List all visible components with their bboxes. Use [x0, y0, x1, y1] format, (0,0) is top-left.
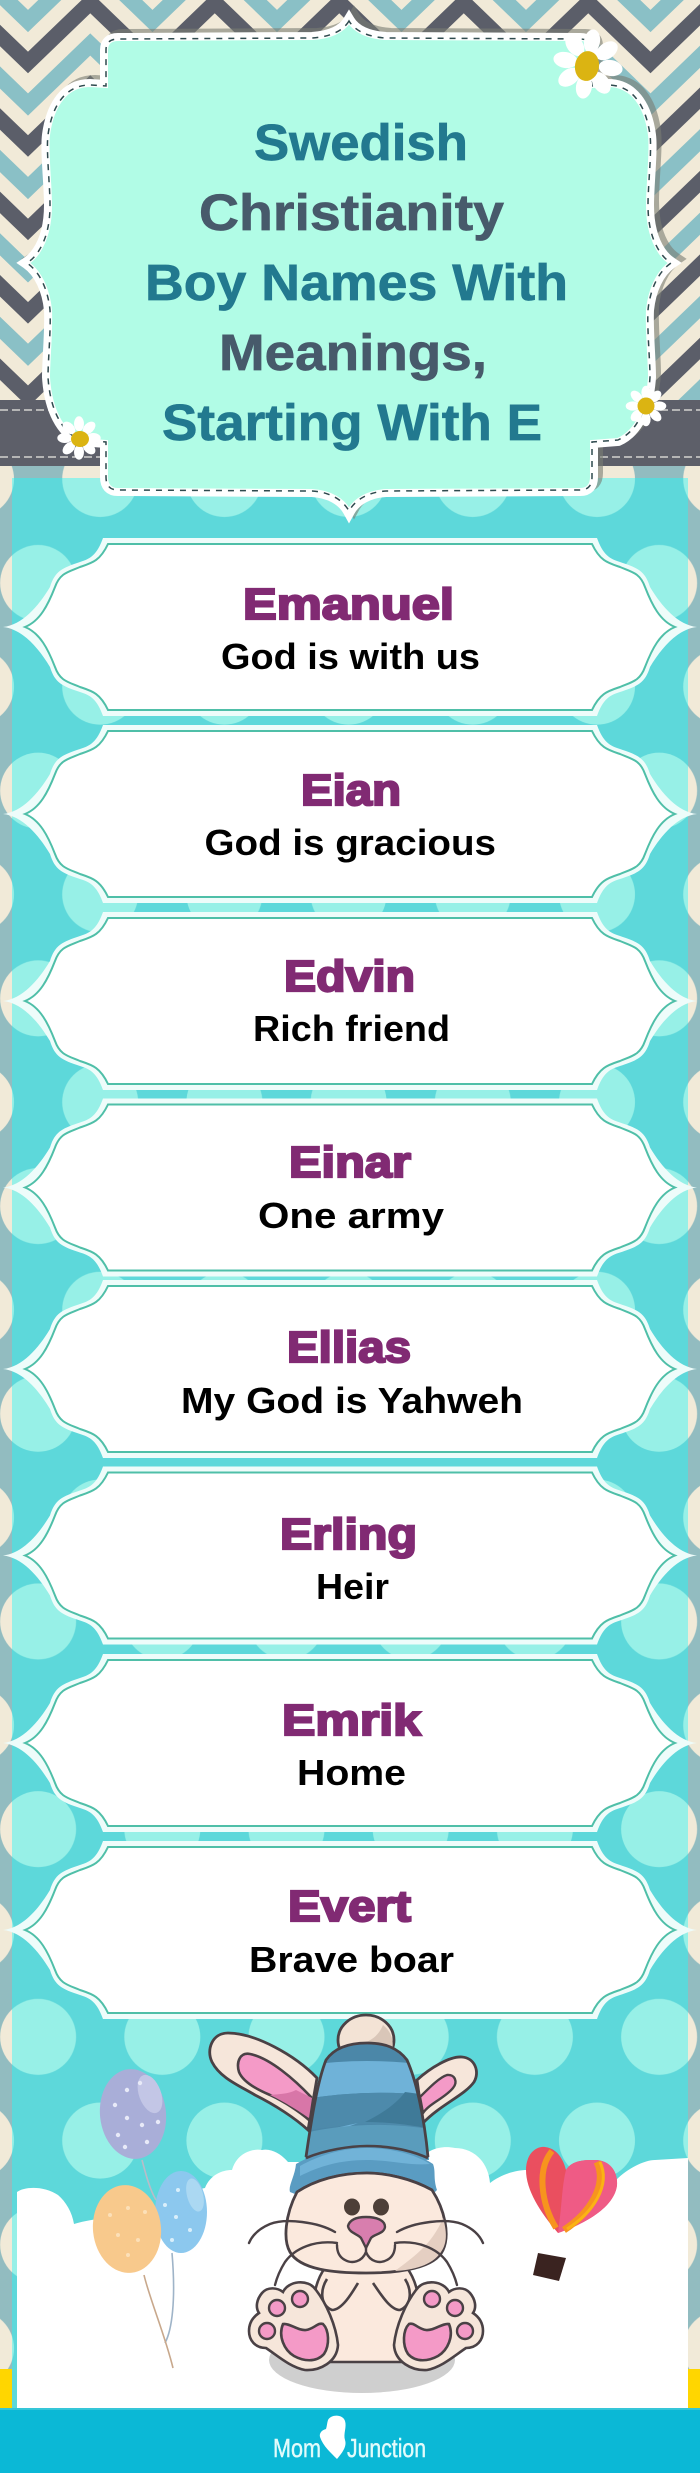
balloon strings — [142, 2160, 174, 2368]
footer bar — [0, 2408, 700, 2473]
title: Christianity — [199, 184, 505, 241]
feet — [249, 2282, 483, 2370]
card: Evert — [3, 1841, 697, 2019]
card: Emanuel — [3, 538, 697, 716]
title: Swedish — [254, 114, 468, 171]
nose — [348, 2217, 385, 2248]
card: Einar: One army — [258, 1195, 444, 1236]
card: Ellias: My God is Yahweh — [181, 1380, 523, 1421]
card: Emanuel: God is with us — [221, 636, 480, 677]
card: Erling: Heir — [316, 1566, 389, 1607]
eyes — [344, 2198, 389, 2216]
head — [286, 2173, 446, 2273]
title: Boy Names With — [145, 254, 568, 311]
card: Einar — [3, 1098, 697, 1276]
title: Starting With E — [162, 394, 542, 451]
card: Erling — [3, 1466, 697, 1644]
ground shadow — [269, 2327, 455, 2393]
card: Edvin: Rich friend — [253, 1008, 450, 1049]
card: Emanuel: Emanuel — [243, 580, 454, 629]
right ear — [417, 2057, 477, 2123]
card: Ellias — [3, 1280, 697, 1458]
MomJunction logo: Mom — [273, 2433, 321, 2463]
MomJunction logo — [273, 2416, 426, 2463]
card: Emrik: Emrik — [282, 1696, 422, 1745]
logo icon — [320, 2416, 346, 2459]
grey stitched band — [0, 400, 700, 466]
purple balloon — [95, 2066, 171, 2162]
white cloud — [17, 2147, 688, 2408]
card: Emrik — [3, 1654, 697, 1832]
orange balloon — [89, 2182, 165, 2276]
icon: daisy bottom left — [57, 416, 101, 460]
left ear — [210, 2033, 317, 2130]
card: Evert: Evert — [288, 1882, 411, 1931]
card: Emrik: Home — [297, 1752, 406, 1793]
hat — [304, 2042, 430, 2160]
icon: daisy bottom right — [626, 386, 666, 426]
card: Erling: Erling — [280, 1510, 417, 1559]
card: Evert: Brave boar — [249, 1939, 454, 1980]
hat brim — [290, 2146, 437, 2194]
card: Eian — [3, 725, 697, 903]
bunny illustration — [210, 2015, 483, 2393]
card: Edvin — [3, 912, 697, 1090]
title: Meanings, — [219, 324, 487, 381]
icon: daisy top right — [547, 23, 629, 105]
card: Edvin: Edvin — [284, 952, 415, 1001]
card: Ellias: Ellias — [287, 1323, 411, 1372]
chevron background — [0, 0, 700, 438]
card: Einar: Einar — [289, 1138, 411, 1187]
hot air balloon heart — [526, 2147, 617, 2281]
card: Eian: God is gracious — [204, 822, 496, 863]
mouth and whiskers — [249, 2221, 483, 2285]
blue balloon — [155, 2171, 207, 2253]
balloon basket — [533, 2253, 566, 2281]
balloons — [89, 2066, 207, 2368]
MomJunction logo: Junction — [347, 2433, 426, 2463]
pom pom — [338, 2015, 394, 2065]
body — [312, 2268, 420, 2362]
card: Eian: Eian — [301, 766, 401, 815]
panel: title plaque — [27, 17, 676, 511]
title — [145, 114, 568, 451]
